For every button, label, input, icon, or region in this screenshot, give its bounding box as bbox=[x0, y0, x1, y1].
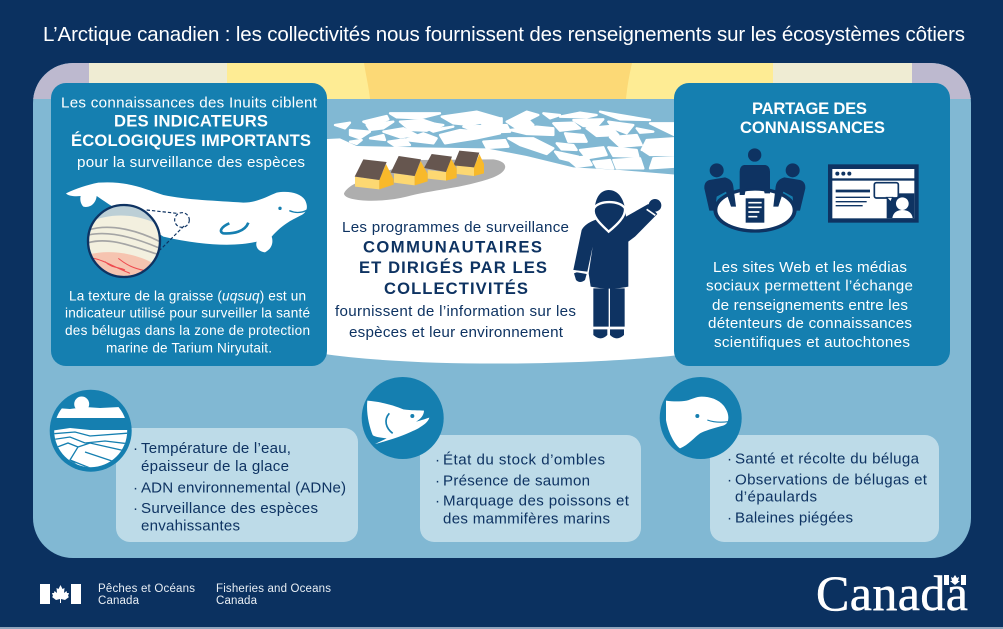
department name: Fisheries and Oceans bbox=[216, 583, 331, 595]
heading: knowledge sharing: PARTAGE DES bbox=[752, 99, 867, 118]
department name: Canada bbox=[98, 595, 140, 607]
icon: beluga whale with blubber sample bbox=[66, 182, 307, 280]
department name: Canada bbox=[216, 595, 258, 607]
house 3 bbox=[424, 154, 457, 181]
icon: person in parka waving bbox=[573, 190, 661, 338]
icon: sea ice circle bbox=[50, 390, 132, 475]
list box: fish: · bbox=[435, 473, 440, 490]
list box: environment: · bbox=[133, 480, 138, 497]
list box: beluga: · bbox=[727, 471, 732, 488]
heading: indicators bbox=[61, 95, 318, 171]
knowledge sharing text: de renseignements entre les bbox=[712, 297, 908, 314]
list box: fish: Marquage des poissons et bbox=[443, 493, 630, 510]
icon: fish head circle bbox=[362, 377, 444, 459]
list box: beluga: Observations de bélugas et bbox=[735, 471, 928, 488]
list box: beluga: · bbox=[727, 450, 732, 467]
list box: fish: État du stock d’ombles bbox=[443, 451, 605, 468]
list box: fish: · bbox=[435, 451, 440, 468]
heading: indicators: DES INDICATEURS bbox=[114, 112, 268, 131]
knowledge sharing text: détenteurs de connaissances bbox=[708, 315, 912, 332]
house 2 bbox=[391, 156, 428, 185]
blubber text: indicateur utilisé pour surveiller la santé bbox=[65, 306, 310, 320]
center text block: COLLECTIVITÉS bbox=[384, 279, 528, 298]
list box: environment: ADN environnemental (ADNe) bbox=[141, 480, 346, 497]
heading: indicators: ÉCOLOGIQUES IMPORTANTS bbox=[71, 131, 311, 150]
list box: beluga bbox=[710, 435, 939, 542]
DFO signature bbox=[40, 583, 331, 607]
center text block: COMMUNAUTAIRES bbox=[363, 238, 542, 257]
icon: Canadian flag bbox=[40, 584, 81, 604]
knowledge sharing text: Les sites Web et les médias bbox=[713, 259, 907, 276]
list box: environment: envahissantes bbox=[141, 518, 240, 535]
knowledge sharing text: sociaux permettent l’échange bbox=[706, 278, 913, 295]
house 4 bbox=[453, 151, 484, 176]
list box: beluga: Santé et récolte du béluga bbox=[735, 450, 920, 467]
panel: ecological indicators bbox=[51, 83, 327, 366]
center text block: Les programmes de surveillance bbox=[342, 219, 569, 236]
knowledge sharing text bbox=[706, 259, 913, 351]
blubber text: des bélugas dans la zone de protection bbox=[65, 323, 310, 338]
department name bbox=[98, 583, 331, 607]
blubber text bbox=[65, 289, 310, 356]
center text block: espèces et leur environnement bbox=[349, 324, 564, 341]
heading: indicators: Les connaissances des Inuits ciblent bbox=[61, 95, 318, 112]
icon: people around a table bbox=[704, 148, 805, 233]
village: houses on rocky ground bbox=[344, 151, 505, 201]
blubber text: marine de Tarium Niryutait. bbox=[106, 341, 272, 356]
panel: knowledge sharing bbox=[674, 83, 950, 366]
heading: indicators: pour la surveillance des espèces bbox=[77, 154, 305, 171]
list box: beluga: d’épaulards bbox=[735, 489, 817, 506]
icon: web page with speech bubble bbox=[828, 164, 919, 223]
list box: fish: Présence de saumon bbox=[443, 473, 590, 490]
department name: Pêches et Océans bbox=[98, 583, 195, 595]
list box: environment: Surveillance des espèces bbox=[141, 500, 318, 517]
list box: beluga: Baleines piégées bbox=[735, 509, 853, 526]
knowledge sharing text: scientifiques et autochtones bbox=[714, 334, 910, 351]
icon: beluga head circle bbox=[660, 377, 742, 459]
list box: fish: des mammifères marins bbox=[443, 510, 610, 527]
list box: environment: Température de l’eau, bbox=[141, 440, 291, 457]
list box: beluga: · bbox=[727, 509, 732, 526]
list box: environment: · bbox=[133, 500, 138, 517]
list box: fish: · bbox=[435, 493, 440, 510]
heading: knowledge sharing bbox=[740, 99, 885, 137]
blubber text: La texture de la graisse (uqsuq) est un bbox=[69, 289, 306, 304]
heading: knowledge sharing: CONNAISSANCES bbox=[740, 118, 885, 137]
sea ice and snow ground bbox=[320, 112, 680, 364]
list box: environment bbox=[116, 428, 358, 542]
list box: fish bbox=[420, 435, 641, 542]
house 1 bbox=[355, 159, 394, 189]
main scene background bbox=[33, 63, 971, 558]
list box: environment: · bbox=[133, 440, 138, 457]
center text block: fournissent de l’information sur les bbox=[335, 303, 576, 320]
list box: environment: épaisseur de la glace bbox=[141, 458, 289, 475]
Canada wordmark: Canada bbox=[816, 565, 968, 621]
center text block bbox=[335, 219, 576, 341]
title: L’Arctique canadien : les collectivités nous fournissent des renseignements sur les écosystèmes côtiers bbox=[43, 23, 965, 46]
center text block: ET DIRIGÉS PAR LES bbox=[359, 258, 547, 277]
